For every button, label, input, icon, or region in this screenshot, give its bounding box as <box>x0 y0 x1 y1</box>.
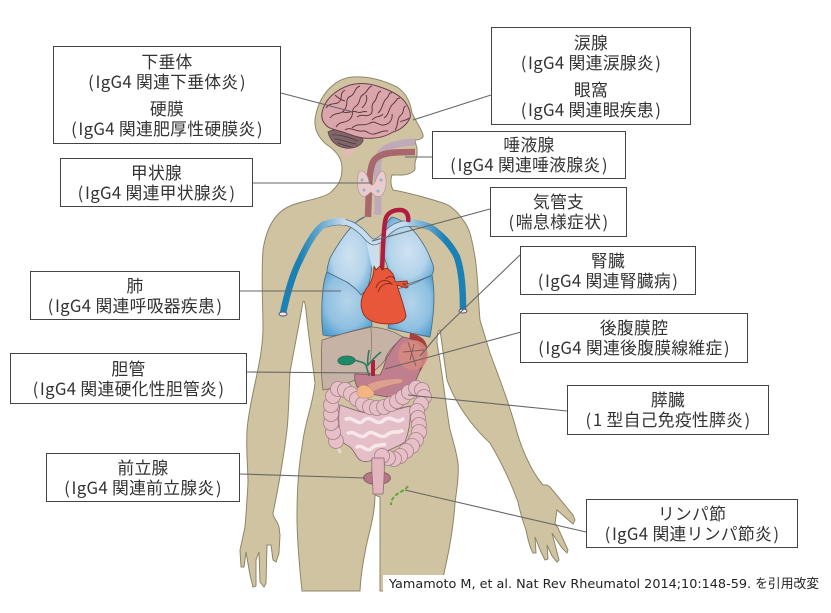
duodenum <box>357 385 374 398</box>
label: retroperitoneum: 後腹膜腔 <box>600 315 668 339</box>
label: salivary gland: 唾液腺 <box>503 132 555 156</box>
label: thyroid <box>60 158 253 207</box>
trachea and bronchi <box>279 221 467 316</box>
spleen <box>408 333 427 372</box>
rectum <box>372 458 384 494</box>
lungs <box>322 217 434 337</box>
colon <box>324 380 432 466</box>
label: kidney: 腎臓 <box>591 248 625 272</box>
label: lung <box>30 271 240 320</box>
label: lacrimal gland and orbit: ( IgG4 関連涙腺炎 ) <box>521 50 661 74</box>
label: thyroid: 甲状腺 <box>131 160 182 184</box>
label: lymph node: リンパ節 <box>658 500 726 524</box>
brain stem <box>343 140 362 158</box>
label: lacrimal gland and orbit <box>491 27 691 125</box>
citation <box>383 575 831 599</box>
label: pancreas <box>567 385 769 435</box>
small intestine <box>339 405 410 462</box>
aorta <box>371 360 375 376</box>
stomach <box>355 337 423 397</box>
label: prostate: 前立腺 <box>117 454 169 478</box>
label: thyroid: ( IgG4 関連甲状腺炎 ) <box>78 180 235 204</box>
heart <box>361 266 408 324</box>
pancreas <box>368 379 403 394</box>
prostate <box>364 472 390 484</box>
label: bronchi <box>490 187 627 237</box>
gallbladder and bile duct <box>338 350 381 376</box>
aortic arch <box>382 210 408 272</box>
label: lacrimal gland and orbit: 眼窩 <box>574 76 608 100</box>
retroperitoneal kidney patch <box>398 340 428 370</box>
leader lines <box>240 93 586 532</box>
label: lung: 肺 <box>126 272 144 296</box>
label: lacrimal gland and orbit: ( IgG4 関連眼疾患 ) <box>521 96 661 120</box>
label: prostate <box>46 453 240 502</box>
label: salivary gland: ( IgG4 関連唾液腺炎 ) <box>450 152 608 176</box>
label: prostate: ( IgG4 関連前立腺炎 ) <box>64 474 222 498</box>
label: pituitary and sclera <box>53 46 281 144</box>
oral airway tube <box>368 152 415 217</box>
label: kidney <box>520 246 696 295</box>
liver <box>321 327 403 390</box>
label: retroperitoneum <box>520 313 748 363</box>
label: retroperitoneum: ( IgG4 関連後腹膜線維症 ) <box>538 335 730 359</box>
label: lung: ( IgG4 関連呼吸器疾患 ) <box>48 292 222 316</box>
label: lymph node <box>586 499 798 548</box>
label: pituitary and sclera: 硬膜 <box>150 96 184 120</box>
label: pancreas: ( 1 型自己免疫性膵炎 ) <box>586 407 750 431</box>
label: pituitary and sclera: ( IgG4 関連下垂体炎 ) <box>88 68 246 92</box>
label: pituitary and sclera: 下垂体 <box>141 48 193 72</box>
label: bile duct <box>10 353 247 404</box>
citation: Yamamoto M, et al. Nat Rev Rheumatol 2014;10:148-59. を引用改変 <box>389 577 819 592</box>
throat and esophagus <box>378 142 415 215</box>
label: pancreas: 膵臓 <box>651 387 685 411</box>
cerebellum <box>328 129 363 148</box>
label: lacrimal gland and orbit: 涙腺 <box>574 30 608 54</box>
thyroid <box>357 171 386 197</box>
label: salivary gland <box>432 131 626 179</box>
label: kidney: ( IgG4 関連腎臓病 ) <box>538 268 678 292</box>
label: lymph node: ( IgG4 関連リンパ節炎 ) <box>605 520 779 544</box>
label: bile duct: ( IgG4 関連硬化性胆管炎 ) <box>33 376 224 400</box>
label: bronchi: 気管支 <box>533 189 584 213</box>
label: bronchi: ( 喘息様症状 ) <box>508 209 609 233</box>
lymph node <box>391 486 408 505</box>
label: bile duct: 胆管 <box>111 356 146 380</box>
label: pituitary and sclera: ( IgG4 関連肥厚性硬膜炎 ) <box>71 116 263 140</box>
human body silhouette <box>240 77 575 591</box>
appendix <box>337 445 340 452</box>
brain <box>322 84 410 138</box>
